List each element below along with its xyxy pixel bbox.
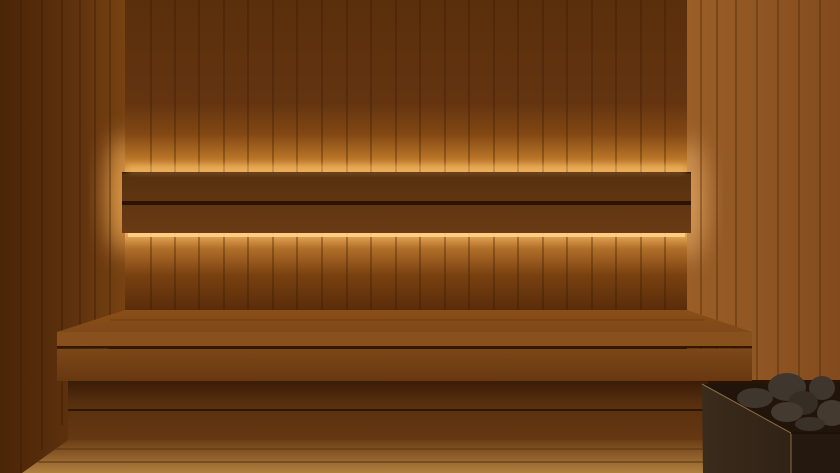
LED glow above rail <box>128 165 685 172</box>
under-bench panels <box>68 381 708 440</box>
bench seat <box>57 310 752 381</box>
right wall <box>687 0 840 380</box>
heater box <box>702 384 840 473</box>
heater stones <box>737 373 840 431</box>
LED glow below rail <box>128 233 685 237</box>
heater interior <box>702 383 840 433</box>
left wall <box>0 0 125 473</box>
back wall <box>125 0 687 311</box>
floor step <box>22 440 705 473</box>
backrest rail <box>122 172 691 233</box>
heater <box>702 373 840 473</box>
